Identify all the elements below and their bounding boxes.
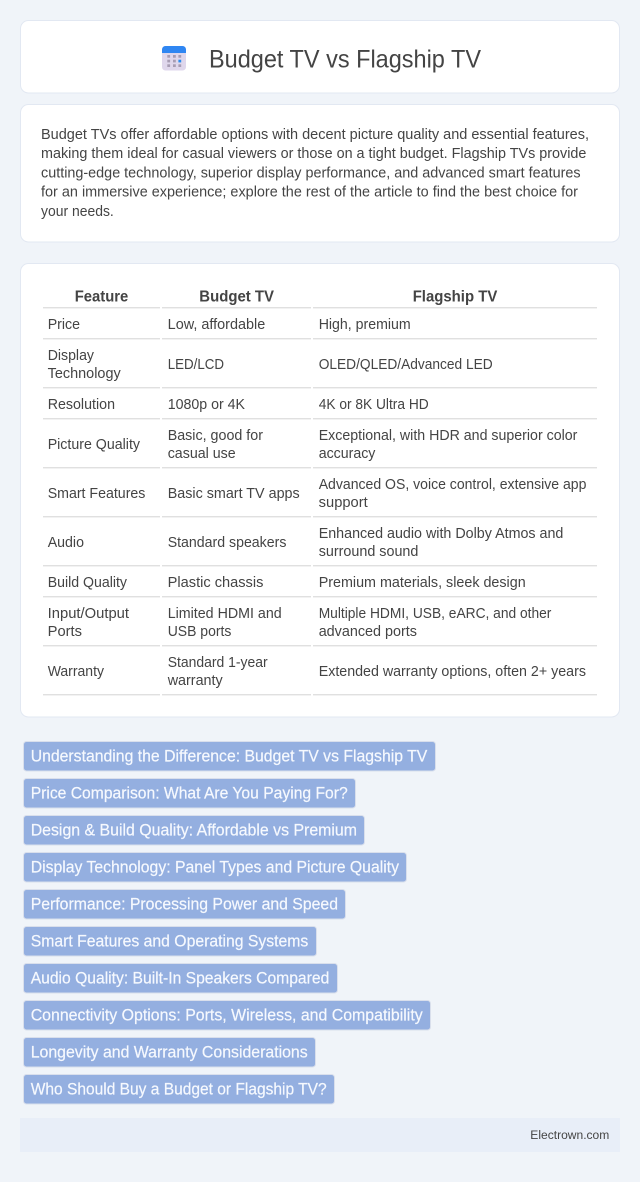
row: input/output ports: [48, 606, 552, 640]
row: warranty: Warranty: [48, 664, 105, 680]
link: price comparison: [24, 778, 356, 808]
row: audio: Enhanced audio with Dolby Atmos and: [319, 526, 563, 542]
row: picture quality: Basic, good for: [168, 428, 263, 444]
row: resolution: 1080p or 4K: [168, 397, 245, 413]
link: understanding the difference: Understanding the Difference: Budget TV vs Flagship TV: [31, 748, 427, 766]
row: input/output ports: Limited HDMI and: [168, 606, 282, 622]
link: display technology: Display Technology: Panel Types and Picture Quality: [31, 858, 400, 876]
row: build quality: Premium materials, sleek design: [319, 575, 526, 591]
intro text block: making them ideal for casual viewers or those on a tight budget. Flagship TVs provide: [41, 146, 586, 162]
row: picture quality: Picture Quality: [48, 437, 141, 453]
row: audio: surround sound: [319, 544, 418, 560]
link: understanding the difference: [24, 742, 436, 771]
link: performance: [24, 890, 346, 919]
link: connectivity options: Connectivity Options: Ports, Wireless, and Compatibility: [31, 1006, 423, 1024]
footer: [20, 1118, 620, 1152]
row: warranty: warranty: [167, 673, 223, 689]
table header row: [75, 289, 498, 306]
icon: calendar grid: [162, 46, 186, 70]
row: resolution: [48, 397, 429, 413]
link: price comparison: Price Comparison: What Are You Paying For?: [31, 784, 348, 802]
title: Budget TV vs Flagship TV: [209, 46, 482, 74]
row: build quality: Plastic chassis: [168, 575, 263, 591]
section links list: [24, 742, 436, 1104]
row: price: High, premium: [319, 317, 411, 333]
link: design and build quality: Design & Build Quality: Affordable vs Premium: [31, 822, 357, 840]
table header row: Feature: [75, 289, 128, 306]
row: audio: Audio: [48, 535, 84, 551]
row: smart features: Advanced OS, voice control, extensive app: [319, 477, 586, 493]
intro panel: [20, 104, 620, 242]
row: warranty: [48, 655, 586, 689]
row: audio: [48, 526, 563, 560]
link: who should buy: Who Should Buy a Budget or Flagship TV?: [31, 1080, 327, 1098]
row: input/output ports: USB ports: [168, 624, 231, 640]
row: resolution: 4K or 8K Ultra HD: [319, 397, 429, 413]
intro text block: cutting-edge technology, superior display performance, and advanced smart features: [41, 165, 581, 181]
intro text block: [41, 127, 589, 220]
row: display technology: Technology: [48, 366, 121, 382]
row: price: Low, affordable: [168, 317, 265, 333]
row: picture quality: Exceptional, with HDR and superior color: [319, 428, 578, 444]
intro text block: your needs.: [41, 204, 114, 220]
row: smart features: [48, 477, 586, 511]
table row dividers: [43, 307, 597, 695]
row: build quality: [48, 575, 526, 591]
link: audio quality: Audio Quality: Built-In Speakers Compared: [31, 970, 329, 988]
header panel: [20, 20, 620, 93]
row: display technology: [48, 348, 493, 382]
row: resolution: Resolution: [48, 397, 115, 413]
link: smart features: Smart Features and Operating Systems: [31, 932, 308, 950]
row: audio: Standard speakers: [168, 535, 286, 551]
row: smart features: support: [319, 495, 368, 511]
link: display technology: [24, 852, 406, 882]
footer source text: Electrown.com: [530, 1128, 609, 1142]
row: input/output ports: Ports: [48, 624, 82, 640]
link: performance: Performance: Processing Power and Speed: [31, 896, 338, 914]
row: picture quality: casual use: [168, 446, 236, 462]
row: display technology: Display: [48, 348, 95, 364]
row: smart features: Basic smart TV apps: [168, 486, 300, 502]
link: longevity and warranty: [24, 1038, 316, 1067]
row: smart features: Smart Features: [48, 486, 145, 502]
link: smart features: [24, 926, 316, 956]
link: audio quality: [24, 964, 338, 993]
row: display technology: OLED/QLED/Advanced LED: [319, 357, 493, 373]
row: input/output ports: advanced ports: [319, 624, 417, 640]
row: picture quality: accuracy: [319, 446, 376, 462]
row: warranty: Extended warranty options, often 2+ years: [319, 664, 586, 680]
row: display technology: LED/LCD: [168, 357, 224, 373]
link: connectivity options: [24, 1000, 430, 1030]
row: warranty: Standard 1-year: [168, 655, 268, 671]
table header row: Budget TV: [199, 289, 274, 306]
row: input/output ports: Input/Output: [48, 606, 129, 622]
table header row: Flagship TV: [413, 289, 498, 306]
row: input/output ports: Multiple HDMI, USB, eARC, and other: [319, 606, 552, 622]
link: longevity and warranty: Longevity and Warranty Considerations: [31, 1044, 308, 1062]
link: who should buy: [24, 1074, 334, 1104]
comparison table panel: [20, 264, 620, 717]
row: price: Price: [48, 317, 80, 333]
link: design and build quality: [24, 816, 364, 845]
row: price: [48, 317, 411, 333]
row: picture quality: [48, 428, 578, 462]
intro text block: Budget TVs offer affordable options with decent picture quality and essential features,: [41, 127, 589, 143]
intro text block: for an immersive experience; explore the rest of the article to find the best choice for: [41, 185, 578, 201]
row: build quality: Build Quality: [48, 575, 128, 591]
